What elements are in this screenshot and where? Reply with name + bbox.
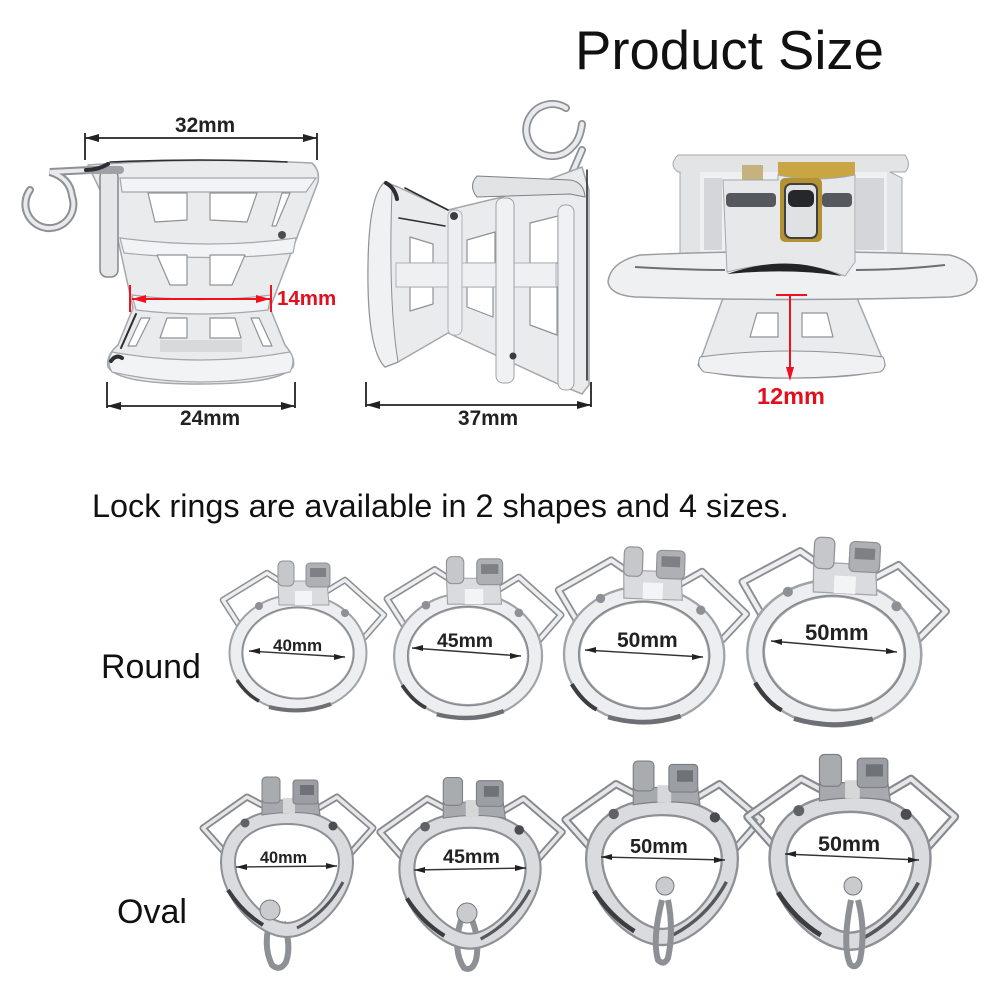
- title: Product Size: [575, 20, 884, 81]
- oval ring 50mm large: 50mm: [818, 832, 880, 856]
- dimension 14mm: 14mm: [277, 287, 336, 310]
- product view: cage side with dimension: [366, 104, 591, 430]
- dimension 24mm: 24mm: [180, 407, 240, 430]
- label: Round: Round: [101, 648, 201, 686]
- cage lock drawing: [608, 155, 977, 378]
- round ring 45mm: 45mm: [437, 630, 493, 652]
- oval rings row: [203, 755, 955, 969]
- cage side drawing: [368, 104, 589, 394]
- dimension 24mm: [107, 382, 295, 430]
- round rings row: [223, 533, 949, 730]
- product view: cage front with dimensions: [25, 114, 336, 430]
- dimension 14mm: [130, 285, 336, 312]
- round ring 40mm: 40mm: [273, 636, 322, 655]
- oval ring 50mm large: [748, 755, 955, 966]
- oval ring 40mm: [203, 777, 373, 968]
- round ring 50mm: [554, 544, 748, 726]
- round ring 50mm large: [735, 533, 949, 730]
- round ring 40mm: [223, 561, 384, 710]
- round ring 45mm: [387, 557, 561, 718]
- round ring 50mm large: 50mm: [805, 620, 869, 645]
- oval ring 45mm: [380, 777, 562, 969]
- cage front drawing: [25, 160, 318, 384]
- round ring 50mm: 50mm: [617, 629, 678, 652]
- oval ring 50mm: 50mm: [630, 836, 688, 858]
- dimension 12mm: 12mm: [757, 383, 825, 409]
- dimension 32mm: 32mm: [175, 114, 235, 137]
- dimension 32mm: [85, 114, 317, 160]
- oval ring 45mm: 45mm: [443, 846, 500, 868]
- dimension 37mm: 37mm: [458, 407, 518, 430]
- subtitle: Lock rings are available in 2 shapes and 4 sizes.: [92, 488, 789, 524]
- oval ring 50mm: [565, 761, 761, 963]
- dimension 37mm: [366, 382, 591, 430]
- label: Oval: Oval: [117, 893, 187, 931]
- oval ring 40mm: 40mm: [260, 849, 307, 867]
- dimension 12mm: [757, 295, 825, 409]
- product view: cage with lock and dimension: [608, 155, 977, 409]
